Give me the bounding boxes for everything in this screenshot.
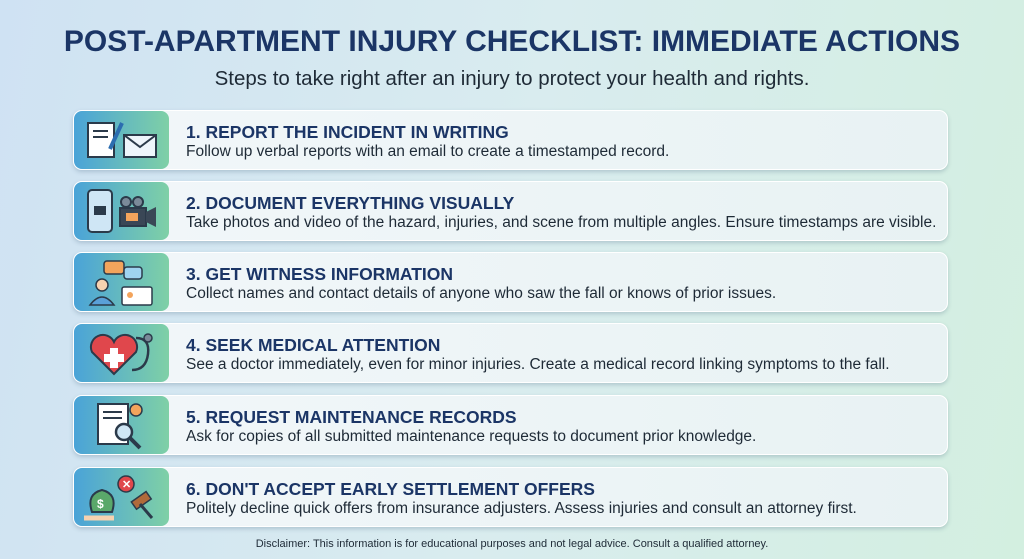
card 4 <box>73 323 948 383</box>
disclaimer: Disclaimer: This information is for educational purposes and not legal advice. Consult a qualified attorney. <box>256 538 768 550</box>
card 1 <box>73 110 948 170</box>
description: Take photos and video of the hazard, injuries, and scene from multiple angles. Ensure timestamps are visible. <box>186 214 936 231</box>
description: Collect names and contact details of anyone who saw the fall or knows of prior issues. <box>186 285 776 302</box>
icon: phone camera and video camera <box>74 182 169 240</box>
card 6 <box>73 467 948 527</box>
subtitle: Steps to take right after an injury to protect your health and rights. <box>215 67 809 90</box>
heading: 4. SEEK MEDICAL ATTENTION <box>186 335 440 355</box>
icon: document and envelope <box>74 111 169 169</box>
heading: 5. REQUEST MAINTENANCE RECORDS <box>186 407 517 427</box>
heading: 2. DOCUMENT EVERYTHING VISUALLY <box>186 193 514 213</box>
description: See a doctor immediately, even for minor injuries. Create a medical record linking symptoms to the fall. <box>186 356 890 373</box>
icon: heart with stethoscope <box>74 324 169 382</box>
icon: witness with speech bubbles <box>74 253 169 311</box>
heading: 3. GET WITNESS INFORMATION <box>186 264 453 284</box>
card 2 <box>73 181 948 241</box>
heading: 1. REPORT THE INCIDENT IN WRITING <box>186 122 509 142</box>
description: Follow up verbal reports with an email to create a timestamped record. <box>186 143 669 160</box>
card 3 <box>73 252 948 312</box>
description: Ask for copies of all submitted maintenance requests to document prior knowledge. <box>186 428 756 445</box>
icon: money bag, X and gavel: $ <box>97 497 104 511</box>
heading: 6. DON'T ACCEPT EARLY SETTLEMENT OFFERS <box>186 479 595 499</box>
description: Politely decline quick offers from insurance adjusters. Assess injuries and consult an attorney first. <box>186 500 857 517</box>
icon: records with magnifier <box>74 396 169 454</box>
card 5 <box>73 395 948 455</box>
title: POST-APARTMENT INJURY CHECKLIST: IMMEDIATE ACTIONS <box>64 25 960 58</box>
icon: money bag, X and gavel: ✕ <box>122 479 131 491</box>
icon: money bag, X and gavel <box>74 468 169 526</box>
